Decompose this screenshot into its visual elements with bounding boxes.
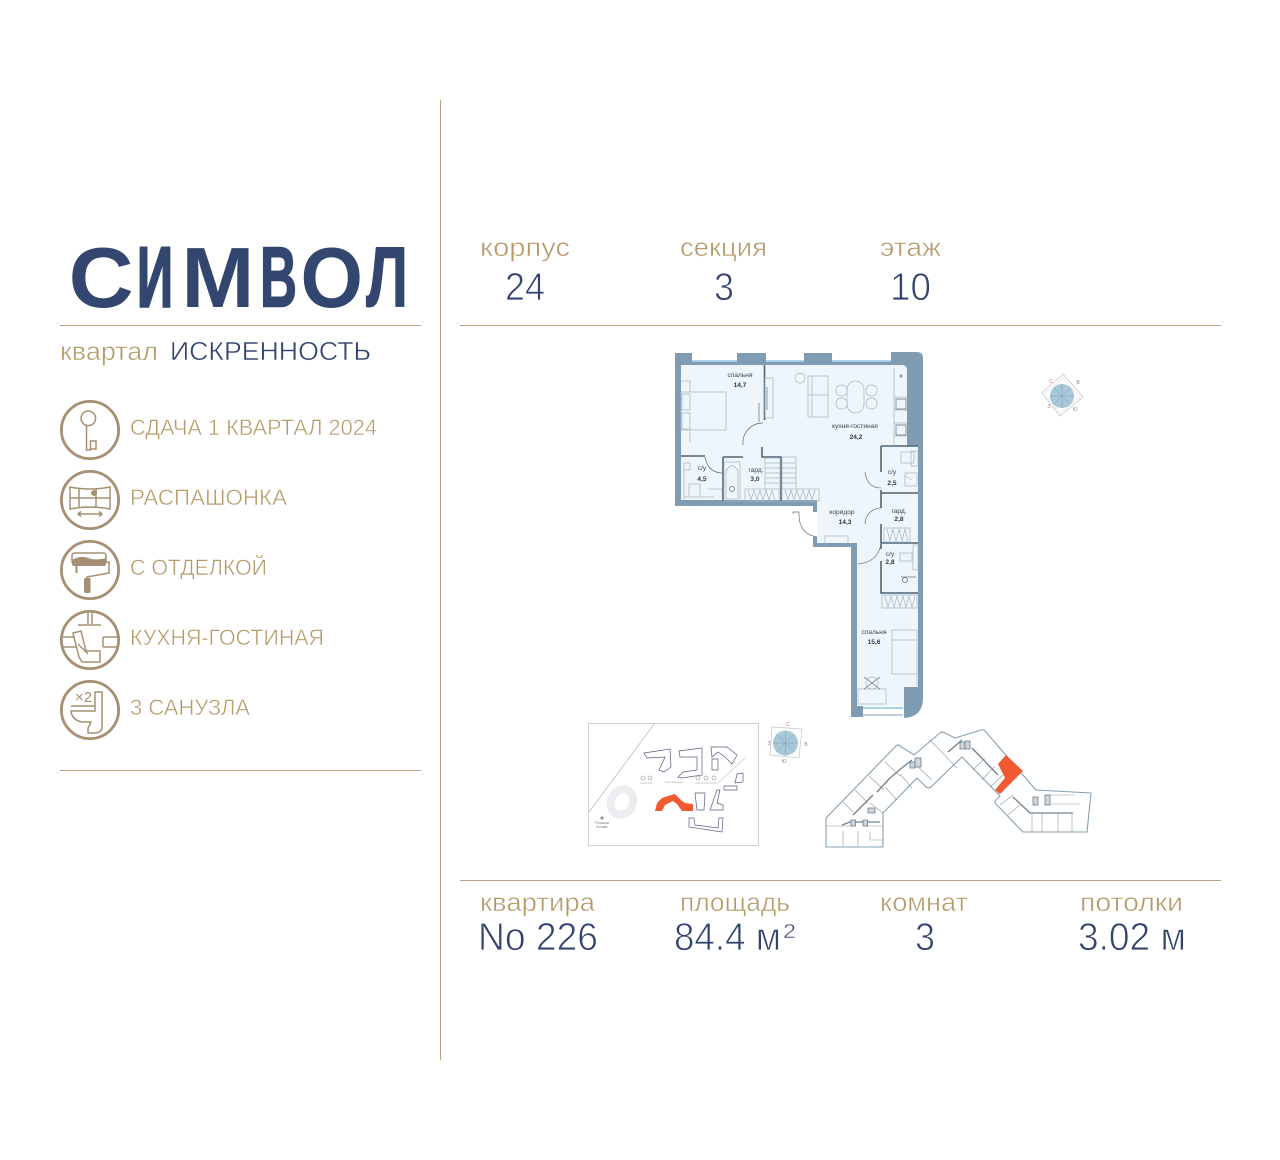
feature list [61,401,377,739]
compass: site plan: В [804,742,808,748]
partitions [826,740,1080,847]
subtitle: квартал ИСКРЕННОСТЬ [60,336,371,366]
room labels: 14,3 [839,519,852,526]
комнат [880,887,968,959]
room labels: 3,0 [750,476,760,483]
room labels: гард. [891,508,907,515]
room labels: коридор [829,509,855,516]
icon: key [61,401,119,459]
bathroom right [901,451,918,486]
room labels: гард. [748,467,764,474]
compass: site plan: З [767,741,771,747]
wardrobes [745,458,780,501]
секция 3 [680,232,767,309]
квартира: квартира [480,887,596,917]
этаж 10: этаж [880,232,942,262]
icon: toilet x2: ×2 [75,689,92,706]
footer: apartment data [478,887,1186,959]
text: kitchen-living: КУХНЯ-ГОСТИНАЯ [130,625,324,650]
комнат: 3 [915,916,935,959]
sofa and dining [808,376,828,417]
text: layout: РАСПАШОНКА [130,485,287,510]
site plan map [588,723,758,846]
interior walls [681,365,918,593]
kitchen [894,368,907,445]
compass: top right: Ю [1072,407,1078,413]
walls [675,352,923,718]
icon: panoramic window [61,471,119,529]
doors [705,423,881,564]
compass: top right: С [1049,379,1053,385]
room labels: 2,5 [887,480,897,487]
площадь [674,887,796,959]
corridor bench [825,536,848,546]
logo: СИМВОЛ: В [260,230,297,326]
room labels: 4,5 [697,476,707,483]
site plan map: Москва [597,825,608,829]
room labels: 24,2 [850,434,863,441]
bed 2 [892,630,917,686]
tower floor plate [826,730,1091,847]
logo: СИМВОЛ [69,230,408,326]
квартира: No 226 [478,916,598,959]
subtitle: квартал ИСКРЕННОСТЬ: ИСКРЕННОСТЬ [170,336,371,366]
site plan map: Ролищаа [595,821,609,825]
text: bathrooms: 3 САНУЗЛА [130,695,250,720]
floor plan [675,352,923,718]
корпус 24: корпус [480,232,570,262]
windows [692,361,903,708]
room labels: спальня [727,372,753,379]
этаж 10: 10 [890,266,931,309]
selected apartment [995,755,1023,794]
площадь: 2 [783,921,796,943]
room labels: с/у [886,551,895,558]
subtitle: квартал ИСКРЕННОСТЬ: квартал [60,336,158,366]
room labels: 15,6 [868,639,881,646]
room labels: кухня-гостиная [832,423,878,430]
text: finish: С ОТДЕЛКОЙ [130,555,267,580]
room labels [697,372,907,646]
desk and chair [858,689,886,704]
потолки [1078,887,1186,959]
logo: СИМВОЛ: О [300,231,363,326]
секция 3: секция [680,232,767,262]
buildings [644,747,743,832]
site plan map: парк Зарядье [665,780,684,784]
header: building data [480,232,942,309]
потолки: потолки [1080,887,1183,917]
секция 3: 3 [714,266,734,309]
corridors [842,740,1073,825]
комнат: комнат [880,887,968,917]
room labels: 14,7 [734,382,747,389]
compass: site plan: Ю [781,759,787,765]
room labels: спальня [861,629,887,636]
room labels: с/у [888,469,897,476]
bathroom 1 [684,463,722,500]
icon: toilet x2 [61,681,119,739]
compass: top right [1042,374,1083,416]
корпус 24: 24 [505,266,545,309]
text: handover: СДАЧА 1 КВАРТАЛ 2024 [130,415,377,440]
bed 1 [681,381,726,442]
потолки: 3.02 м [1078,916,1186,959]
room labels: с/у [698,465,707,472]
compass: site plan [767,722,808,765]
этаж 10 [880,232,942,309]
cores [851,741,1050,826]
корпус 24 [480,232,570,309]
furniture [681,368,918,704]
icon: armchair [61,611,119,669]
площадь: площадь [680,887,790,917]
logo: СИМВОЛ: С [69,231,134,326]
tree icons and road labels [640,782,717,784]
room labels: 2,8 [885,559,895,566]
tv [765,378,773,418]
logo: СИМВОЛ: Л [366,231,408,326]
outline [826,730,1091,847]
room labels: 2,8 [894,516,904,523]
compass: top right: В [1076,380,1080,386]
logo: СИМВОЛ: И [137,230,173,326]
площадь: 84.4 м [674,916,781,959]
selected building [655,794,693,811]
compass: site plan: С [786,722,790,728]
квартира [478,887,598,959]
stadium oval [607,786,637,818]
icon: paint roller [61,541,119,599]
compass: top right: З [1047,404,1051,410]
interior floor [681,363,918,706]
logo: СИМВОЛ: М [181,231,254,326]
